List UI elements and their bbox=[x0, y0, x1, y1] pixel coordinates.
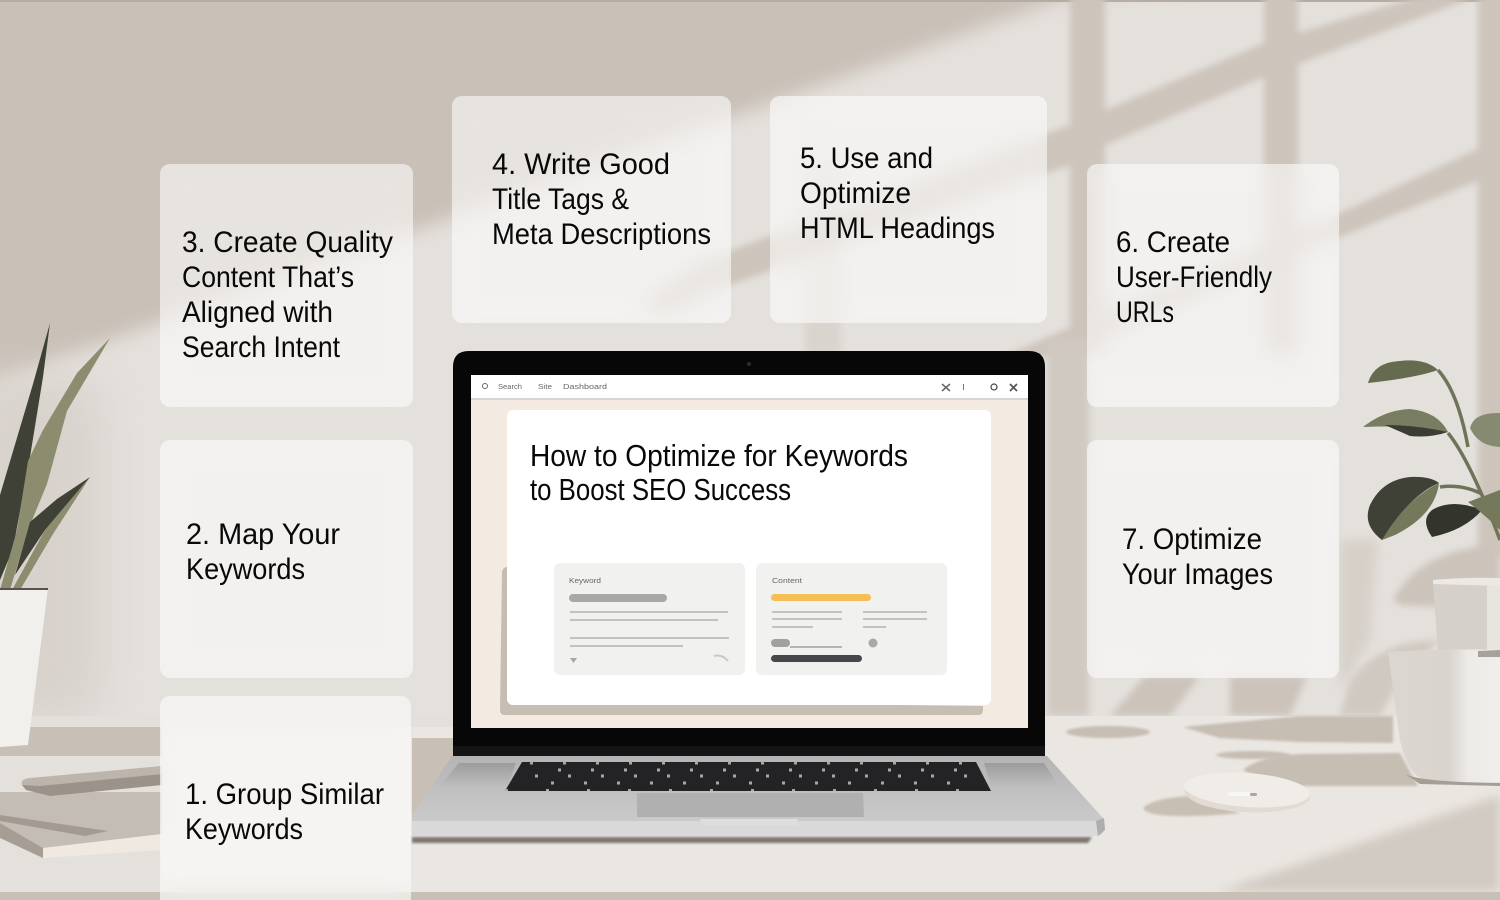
card 1: Keywords bbox=[185, 813, 303, 846]
card 1 bbox=[160, 696, 411, 900]
title: How to Optimize for Keywords bbox=[530, 438, 908, 473]
card 1: 1. Group Similar bbox=[185, 778, 384, 811]
title: to Boost SEO Success bbox=[530, 472, 791, 507]
browser bar: Search bbox=[498, 384, 522, 391]
card 7: 7. Optimize bbox=[1122, 523, 1262, 556]
browser bar: Dashboard bbox=[563, 384, 607, 391]
card 7 bbox=[1087, 440, 1339, 678]
laptop bbox=[412, 351, 1105, 843]
card 3 bbox=[160, 164, 413, 407]
puck on desk bbox=[1143, 769, 1311, 816]
mini card right: Content bbox=[772, 578, 802, 585]
mini card left: Keyword bbox=[569, 578, 601, 585]
leaves bbox=[1368, 360, 1438, 383]
notebooks on desk bbox=[0, 766, 162, 858]
left plant bbox=[0, 323, 110, 747]
browser bar: Site bbox=[538, 384, 552, 391]
card 5: Optimize bbox=[800, 177, 911, 210]
browser bar bbox=[471, 375, 1028, 400]
card 6: User-Friendly bbox=[1116, 261, 1272, 294]
stems bbox=[1438, 370, 1500, 540]
screen bezel bbox=[453, 351, 1045, 755]
back shadow panel bbox=[500, 567, 983, 715]
card 2: 2. Map Your bbox=[186, 518, 340, 551]
card 6 bbox=[1087, 164, 1339, 407]
card 6: 6. Create bbox=[1116, 226, 1230, 259]
card 3: Aligned with bbox=[182, 296, 333, 329]
keyboard bbox=[505, 762, 991, 791]
card 3: 3. Create Quality bbox=[182, 226, 393, 259]
desk bbox=[0, 716, 1500, 900]
screen bbox=[471, 375, 1028, 728]
back pot bbox=[1433, 580, 1500, 655]
leaves bbox=[0, 323, 50, 580]
card 3: Content That’s bbox=[182, 261, 354, 294]
card 5 bbox=[770, 96, 1047, 323]
card 5: 5. Use and bbox=[800, 142, 933, 175]
card 4: 4. Write Good bbox=[492, 148, 670, 181]
card 7: Your Images bbox=[1122, 558, 1273, 591]
white pot bbox=[0, 588, 48, 747]
card 4 bbox=[452, 96, 731, 323]
card 2: Keywords bbox=[186, 553, 305, 586]
laptop base bbox=[412, 756, 1105, 843]
card 5: HTML Headings bbox=[800, 212, 995, 245]
mini card right bbox=[756, 563, 947, 675]
card 6: URLs bbox=[1116, 296, 1174, 329]
card 4: Title Tags & bbox=[492, 183, 629, 216]
wall plant shadows bbox=[1110, 540, 1500, 716]
mini card left bbox=[554, 563, 745, 675]
card 3: Search Intent bbox=[182, 331, 341, 364]
right plant bbox=[1363, 360, 1500, 786]
card 4: Meta Descriptions bbox=[492, 218, 711, 251]
main white card bbox=[507, 410, 991, 705]
front pot bbox=[1388, 649, 1500, 782]
card 2 bbox=[160, 440, 413, 678]
